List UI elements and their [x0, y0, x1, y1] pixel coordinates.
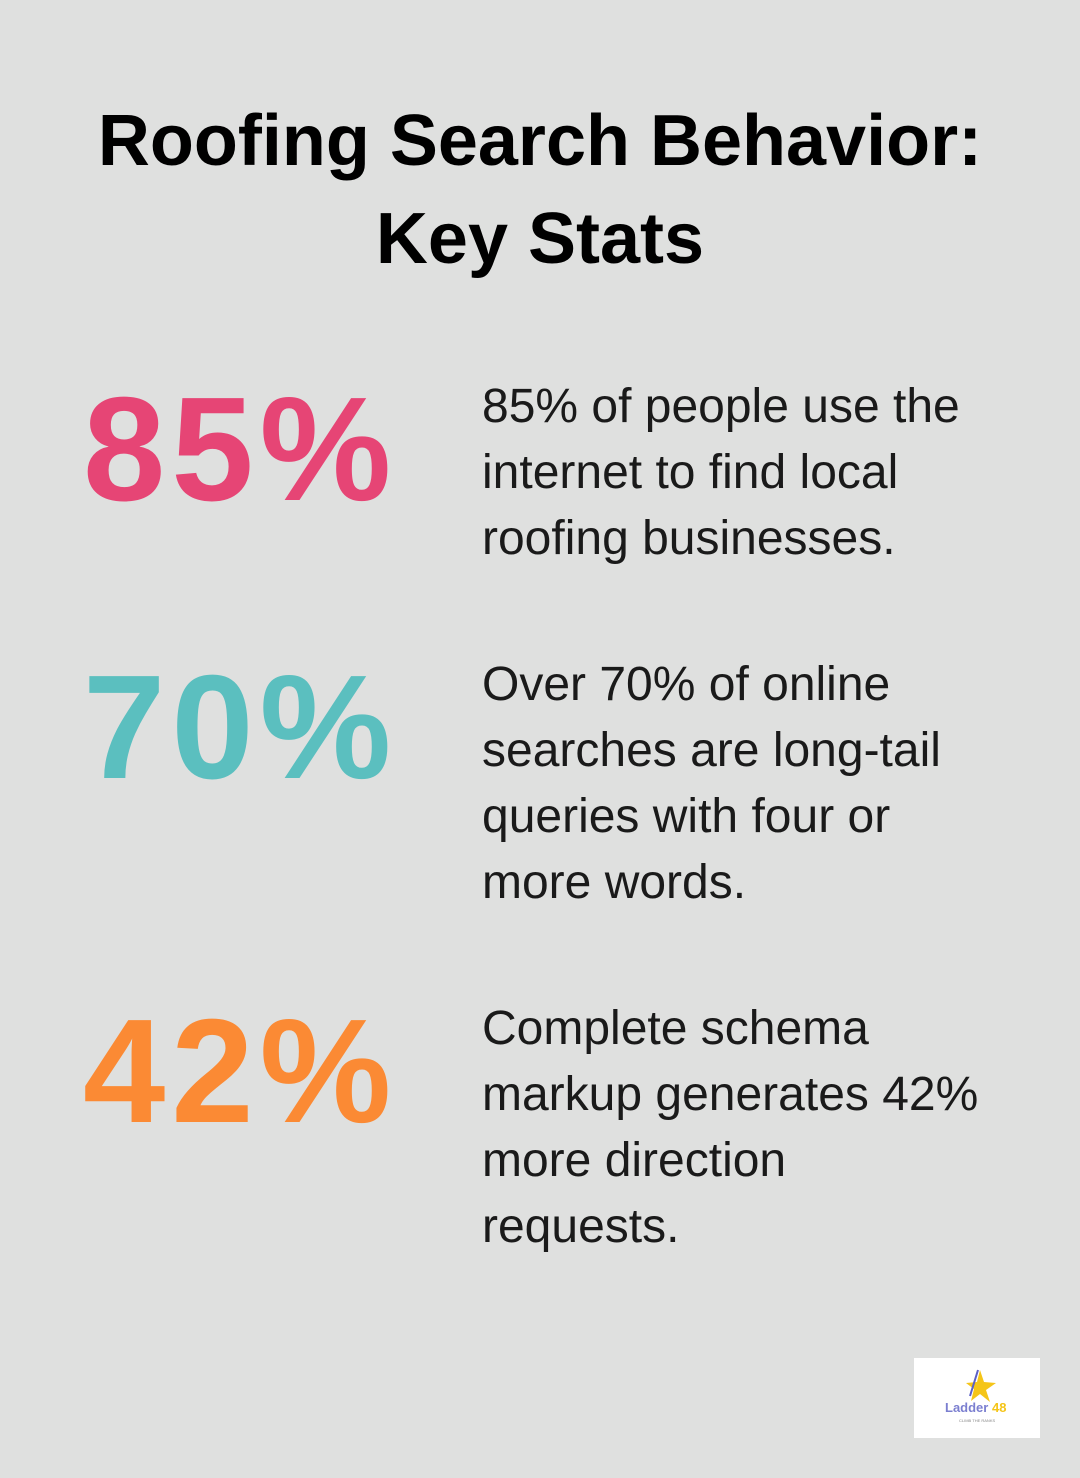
stat 85% text: 85% of people use the [482, 380, 960, 433]
stat 70% text: searches are long-tail [482, 724, 941, 777]
logo: Ladder 48: Ladder 48 [945, 1400, 1006, 1415]
stat 70% text: more words. [482, 856, 746, 909]
title: Key Stats [376, 199, 704, 279]
stat 70% text: Over 70% of online [482, 658, 890, 711]
stat 85% text: internet to find local [482, 446, 898, 499]
stat 42% text: markup generates 42% [482, 1068, 978, 1121]
logo: Ladder 48: CLIMB THE RANKS [959, 1418, 995, 1423]
stat 70% text: queries with four or [482, 790, 890, 843]
stat 85% number: 85% [83, 367, 397, 532]
stat 42% number: 42% [83, 989, 397, 1154]
stat 42% text [482, 1002, 978, 1253]
logo: Ladder 48 [914, 1358, 1040, 1438]
stat 70% number: 70% [83, 645, 397, 810]
title: Roofing Search Behavior: [98, 101, 982, 181]
stat 85% text: roofing businesses. [482, 512, 896, 565]
stat 85% text [482, 380, 960, 565]
stat 42% text: more direction [482, 1134, 786, 1187]
stat 70% text [482, 658, 941, 909]
title [98, 101, 982, 279]
stat 42% text: requests. [482, 1200, 679, 1253]
stat 42% text: Complete schema [482, 1002, 869, 1055]
